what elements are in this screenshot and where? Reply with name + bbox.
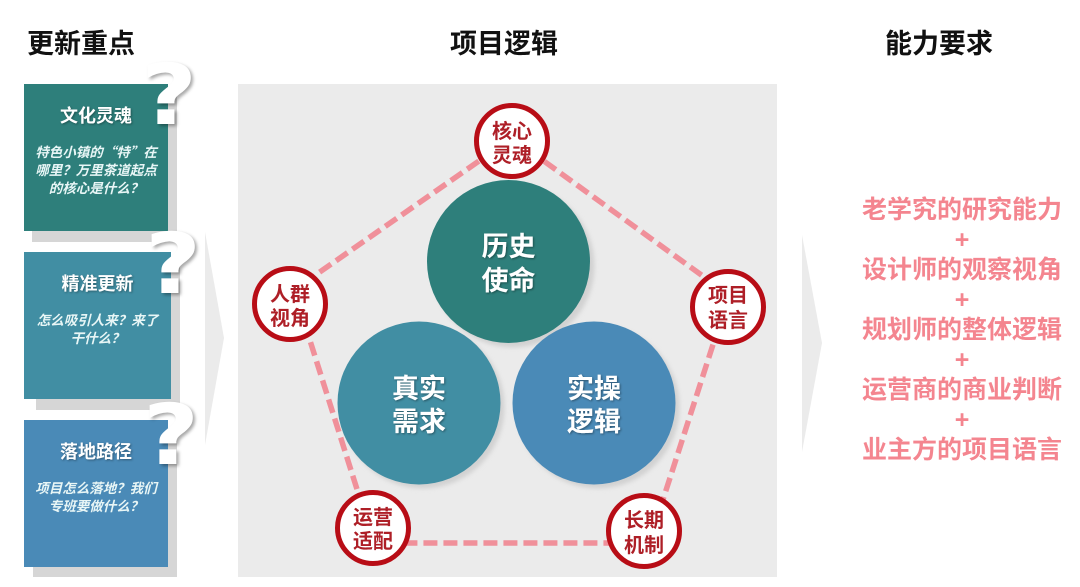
card question text: 怎么吸引人来？来了 xyxy=(37,309,158,329)
text block: capability requirements: 运营商的商业判断 xyxy=(862,376,1062,404)
node: 人群视角: 视角 xyxy=(270,306,310,330)
heading: 更新重点: 更新重点 xyxy=(27,29,135,59)
node: 核心灵魂 xyxy=(476,106,548,176)
arrow: right chevron xyxy=(802,236,822,451)
card question text: 干什么？ xyxy=(70,327,124,347)
heading: 项目逻辑: 项目逻辑 xyxy=(450,29,558,59)
text block: capability requirements: 设计师的观察视角 xyxy=(862,256,1062,284)
text block: capability requirements: 业主方的项目语言 xyxy=(862,436,1062,464)
node: 运营适配: 运营 xyxy=(353,506,393,529)
node: 长期机制: 机制 xyxy=(624,534,664,557)
node: 人群视角: 人群 xyxy=(270,283,310,306)
arrow: left chevron xyxy=(205,233,224,444)
node: 项目语言: 项目 xyxy=(708,285,748,307)
card question text: 专班要做什么？ xyxy=(49,495,143,515)
text block: capability requirements: + xyxy=(955,226,969,254)
card question text: 特色小镇的“特”在 xyxy=(35,141,157,161)
icon: question mark: ? xyxy=(145,215,201,313)
card question text: 的核心是什么？ xyxy=(49,177,143,197)
node: 人群视角 xyxy=(254,268,326,340)
card question text: 项目怎么落地？我们 xyxy=(35,477,157,497)
card question text xyxy=(37,309,160,347)
heading: 能力要求: 能力要求 xyxy=(885,29,993,59)
circle: 历史使命: 历史 xyxy=(482,232,536,262)
circle: 实操逻辑: 实操 xyxy=(567,374,621,404)
node: 项目语言: 语言 xyxy=(708,309,748,332)
card title: 文化灵魂 xyxy=(60,106,132,126)
text block: capability requirements: + xyxy=(955,346,969,374)
text block: capability requirements: 老学究的研究能力 xyxy=(862,196,1062,224)
circle: 真实需求: 真实 xyxy=(392,374,446,404)
card title: 精准更新 xyxy=(62,274,134,294)
text block: capability requirements: + xyxy=(955,286,969,314)
card question text xyxy=(35,477,159,515)
node: 运营适配 xyxy=(338,492,408,564)
node: 项目语言 xyxy=(692,272,764,342)
icon: question mark: ? xyxy=(141,46,197,144)
node: 运营适配: 适配 xyxy=(353,530,393,553)
panel: card 精准更新 xyxy=(24,215,201,410)
circle: 历史使命: 使命 xyxy=(482,265,536,296)
card question text: 哪里？万里茶道起点 xyxy=(35,159,157,179)
circle: 真实需求: 需求 xyxy=(392,407,446,437)
node: 核心灵魂: 灵魂 xyxy=(492,144,532,167)
text block: capability requirements xyxy=(862,196,1062,464)
circle: 历史使命 xyxy=(427,180,594,348)
node: 核心灵魂: 核心 xyxy=(492,119,532,143)
text block: capability requirements: 规划师的整体逻辑 xyxy=(862,316,1062,344)
icon: question mark: ? xyxy=(143,386,199,484)
circle: 真实需求 xyxy=(338,322,504,488)
card title: 落地路径 xyxy=(60,442,132,462)
dashed pentagon xyxy=(294,138,729,543)
circle: 实操逻辑 xyxy=(512,322,680,488)
panel: card 文化灵魂 xyxy=(24,46,197,242)
node: 长期机制: 长期 xyxy=(624,509,664,532)
panel: project logic diagram xyxy=(238,84,777,577)
panel: card 落地路径 xyxy=(24,386,199,577)
node: 长期机制 xyxy=(608,496,680,566)
text block: capability requirements: + xyxy=(955,406,969,434)
circle: 实操逻辑: 逻辑 xyxy=(567,407,621,437)
card question text xyxy=(35,141,158,197)
